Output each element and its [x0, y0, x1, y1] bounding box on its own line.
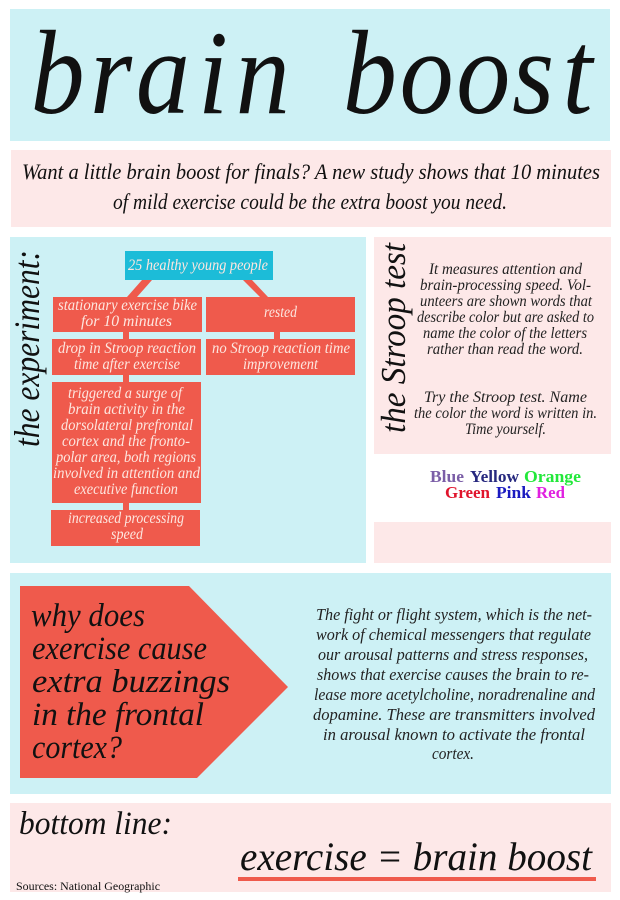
box: stationary exercise bike: stationary exercise bike [58, 297, 197, 314]
box: stationary exercise bike [53, 297, 202, 332]
explanation text [313, 605, 595, 763]
box: drop in Stroop reaction time: time after exercise [74, 356, 180, 373]
box: surge of brain activity: triggered a surge of [68, 385, 184, 402]
Stroop description: brain-processing speed. Vol- [420, 277, 591, 294]
flowchart connectors [123, 280, 280, 510]
explanation text: shows that exercise causes the brain to re- [317, 665, 589, 684]
Stroop color words: Pink [496, 483, 532, 502]
box: surge of brain activity: polar area, both regions [55, 449, 196, 466]
Stroop color words: Orange [524, 467, 581, 486]
explanation text: work of chemical messengers that regulate [316, 625, 591, 644]
arrow callout: question: why does [31, 598, 145, 634]
panel: introduction [11, 150, 611, 227]
Stroop color words: Yellow [470, 467, 519, 486]
Stroop instructions: Try the Stroop test. Name [424, 389, 587, 406]
box: increased processing speed [51, 510, 200, 546]
explanation text: lease more acetylcholine, noradrenaline and [314, 685, 595, 704]
explanation text: The fight or flight system, which is the net- [316, 605, 592, 624]
panel: title [10, 6, 610, 141]
box: 25 healthy young people [125, 251, 273, 280]
Stroop instructions: the color the word is written in. [414, 405, 597, 422]
title [31, 6, 595, 139]
Stroop instructions: Time yourself. [465, 421, 546, 438]
intro text [22, 159, 600, 214]
box: no Stroop improvement: improvement [243, 356, 319, 373]
conclusion with underline: exercise = brain boost [240, 834, 593, 879]
arrow callout: question: exercise cause [32, 631, 207, 667]
box: no Stroop improvement [206, 339, 355, 375]
box: 25 healthy young people: 25 healthy young people [128, 257, 268, 274]
panel: the experiment [7, 237, 366, 563]
Stroop description: name the color of the letters [423, 325, 587, 342]
explanation text: dopamine. These are transmitters involved [313, 705, 595, 724]
sources: Sources: National Geographic [16, 879, 160, 893]
Stroop instructions [414, 389, 597, 438]
Stroop description: unteers are shown words that [420, 293, 593, 310]
box: surge of brain activity: involved in attention and [53, 465, 200, 482]
explanation text: in arousal known to activate the frontal [323, 725, 585, 744]
Stroop color words: Red [536, 483, 565, 502]
heading: the experiment: the experiment: [7, 250, 47, 447]
arrow callout: question [20, 586, 288, 778]
arrow callout: question: cortex? [32, 730, 122, 766]
box: surge of brain activity [52, 382, 201, 503]
box: rested [206, 297, 355, 332]
explanation text: our arousal patterns and stress responses, [318, 645, 588, 664]
heading: the Stroop test: the Stroop test [374, 242, 413, 433]
Stroop description: rather than read the word. [427, 341, 583, 358]
heading: bottom line: bottom line: [19, 806, 172, 842]
box: surge of brain activity: brain activity in the [68, 401, 185, 418]
arrow callout: question: in the frontal [32, 697, 204, 733]
explanation text: cortex. [432, 744, 474, 763]
box: increased processing speed: speed [111, 526, 143, 543]
Stroop description: It measures attention and [428, 261, 582, 278]
box: surge of brain activity: dorsolateral prefrontal [61, 417, 193, 434]
box: surge of brain activity: executive function [74, 481, 178, 498]
box: increased processing speed: increased processing [68, 510, 184, 527]
Stroop color words [430, 467, 581, 502]
panel: pink strip [374, 522, 611, 563]
title: brain [31, 6, 290, 139]
box: drop in Stroop reaction time: drop in Stroop reaction [58, 340, 196, 357]
Stroop description [417, 261, 594, 358]
box: stationary exercise bike: for 10 minutes [81, 313, 172, 330]
intro text: of mild exercise could be the extra boost you need. [113, 189, 507, 214]
box: rested: rested [264, 304, 297, 321]
arrow callout: question: extra buzzings [32, 664, 230, 700]
title: boost [343, 6, 595, 139]
box: surge of brain activity: cortex and the fronto- [62, 433, 190, 450]
Stroop description: describe color but are asked to [417, 309, 594, 326]
panel: why does exercise [10, 573, 611, 794]
panel: the Stroop test [374, 237, 611, 454]
Stroop color words: Green [445, 483, 490, 502]
panel: bottom line [10, 803, 611, 893]
box: no Stroop improvement: no Stroop reaction time [212, 340, 350, 357]
box: drop in Stroop reaction time [52, 339, 201, 375]
Stroop color words: Blue [430, 467, 464, 486]
